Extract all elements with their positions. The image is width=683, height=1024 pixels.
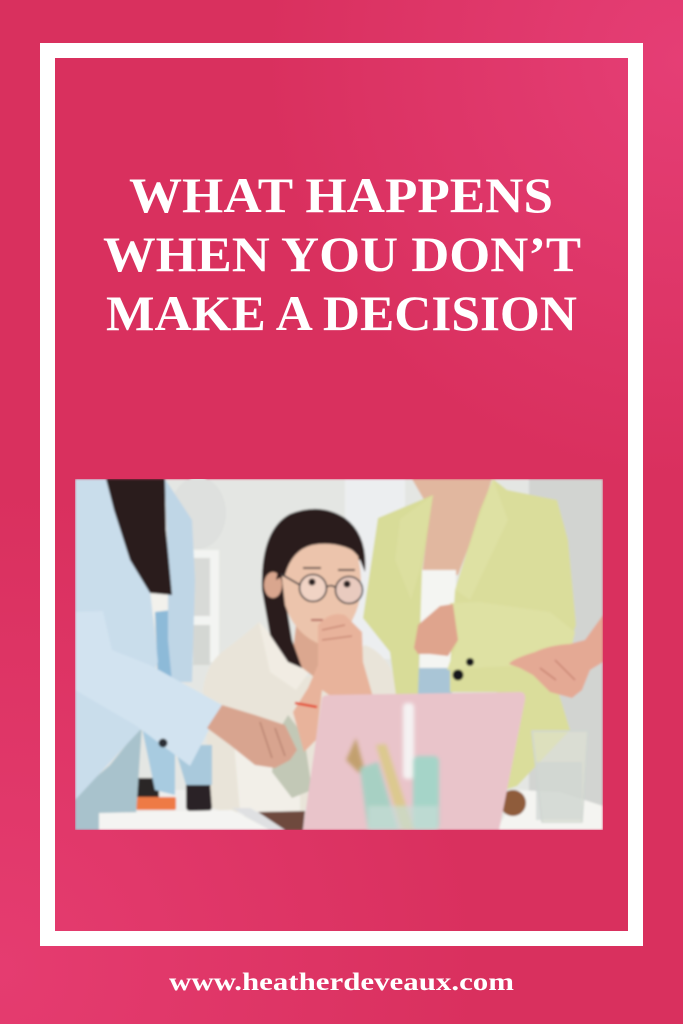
left woman sleeve: [75, 611, 222, 766]
photo: three colleagues around a seated woman at a pink laptop: [75, 477, 603, 830]
right woman cuff and sleeve: [447, 602, 575, 670]
jeans: [416, 668, 452, 696]
pink laptop: [303, 692, 525, 830]
left woman blazer: [75, 479, 160, 800]
blazer buttons: [452, 658, 474, 680]
office wall: [75, 477, 603, 830]
seated woman blouse: [203, 622, 402, 812]
left woman pants: [75, 725, 142, 830]
desk items behind: [135, 776, 214, 812]
eyes and mouth: [303, 567, 355, 621]
wooden bowl: [500, 790, 526, 816]
title: [103, 167, 581, 341]
drinking glass: [532, 731, 588, 822]
left woman long hair: [106, 479, 172, 595]
title: MAKE A DECISION: [106, 285, 577, 341]
right woman skin: [412, 479, 492, 575]
glasses: [281, 574, 362, 604]
hair back: [262, 509, 365, 668]
website url: www.heatherdeveaux.com: [169, 969, 514, 996]
clasped hands and arm: [293, 614, 373, 752]
neck: [292, 626, 320, 677]
bracelet: [295, 703, 317, 707]
right woman top: [420, 570, 456, 670]
pointing hand and forearm: [509, 615, 603, 698]
white shelf: [192, 550, 219, 665]
pen holder and pens: [346, 703, 439, 830]
left woman cuff button: [158, 738, 168, 748]
papers and notebook: [99, 808, 305, 830]
title: WHEN YOU DON’T: [103, 226, 581, 282]
white frame: [48, 50, 636, 938]
seated woman sleeve: [272, 715, 312, 798]
face: [281, 540, 361, 645]
hair fringe: [275, 538, 352, 581]
right woman hand: [414, 604, 458, 656]
right woman blazer: [363, 495, 433, 695]
left woman inner shirt and lining: [150, 592, 168, 618]
title: WHAT HAPPENS: [129, 167, 553, 223]
white table: [497, 790, 603, 830]
left woman hand: [207, 705, 297, 768]
back blue sleeve: [174, 745, 212, 785]
